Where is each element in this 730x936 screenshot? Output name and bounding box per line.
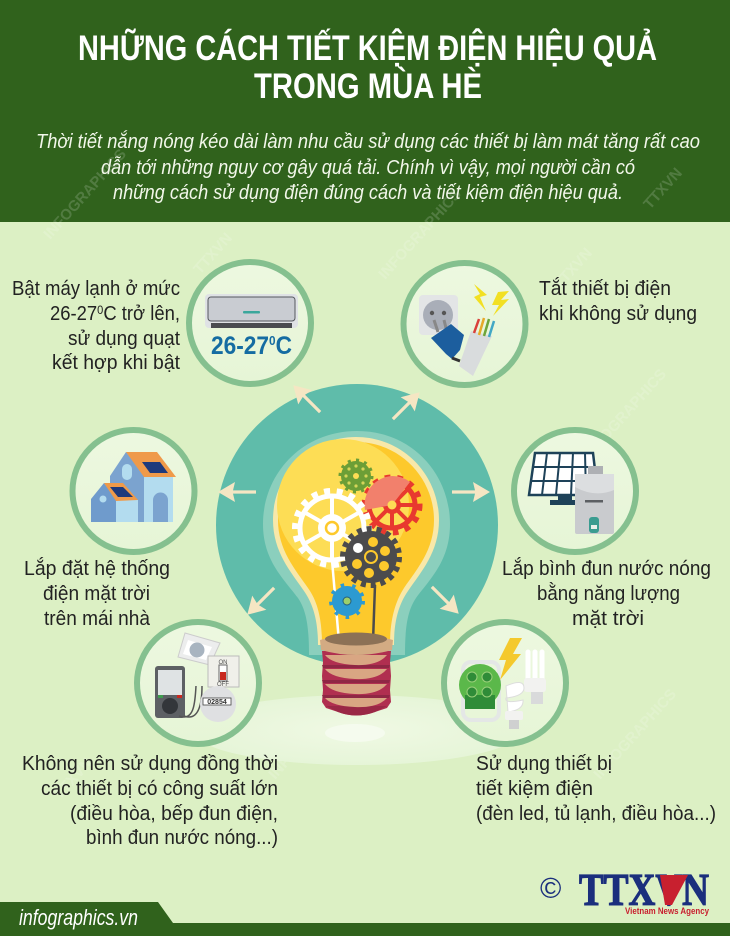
text: TTXVN bbox=[50, 755, 96, 803]
glass highlight bbox=[277, 439, 409, 571]
text: TTXVN bbox=[640, 165, 686, 213]
arrow: to solar heater bbox=[452, 482, 490, 502]
label: air conditioner advice: sử dụng quạt bbox=[68, 328, 180, 350]
label: rooftop solar advice: điện mặt trời bbox=[43, 583, 150, 605]
white stem bbox=[332, 560, 339, 642]
icon: multimeter, socket, switch and meter: OFF bbox=[217, 682, 229, 688]
label: air conditioner advice: Bật máy lạnh ở mức bbox=[12, 278, 180, 300]
gear: white bbox=[296, 492, 368, 564]
label: rooftop solar advice bbox=[24, 557, 170, 630]
text: INFOGRAPHICS bbox=[40, 146, 130, 243]
icon: socket and plug with cables bbox=[419, 284, 509, 376]
footer site name: infographics.vn bbox=[19, 905, 138, 930]
label: air conditioner advice bbox=[12, 278, 180, 374]
label: high-power appliances advice: các thiết bị có công suất lớn bbox=[41, 778, 278, 800]
label: efficient devices advice: (đèn led, tủ lạnh, điều hòa...) bbox=[476, 803, 716, 825]
arrow: to plug bbox=[386, 385, 427, 426]
icon: light bulb with gears bbox=[263, 431, 450, 716]
logo: TTXVN bbox=[540, 865, 709, 916]
icon: multimeter, socket, switch and meter: ON bbox=[218, 660, 228, 666]
label: rooftop solar advice: trên mái nhà bbox=[44, 608, 151, 630]
icon: solar panel and heater bbox=[529, 453, 614, 534]
panel: energy-saving devices circle bbox=[444, 622, 566, 744]
tagline: Vietnam News Agency bbox=[625, 906, 709, 916]
arrow: to meter bbox=[240, 581, 281, 622]
text: INFOGRAPHICS bbox=[265, 686, 355, 783]
text: INFOGRAPHICS bbox=[580, 366, 670, 463]
copyright mark: © bbox=[540, 873, 561, 905]
text: INFOGRAPHICS bbox=[590, 686, 680, 783]
icon: green socket reel, bolt and CFL bulbs bbox=[459, 638, 546, 729]
bulb glass bbox=[273, 437, 439, 645]
teal disc behind bulb bbox=[216, 384, 498, 666]
arrow: to air conditioner bbox=[286, 378, 327, 419]
dark stem bbox=[373, 585, 375, 642]
panel: plug circle bbox=[404, 263, 526, 385]
bulb screw base bbox=[320, 632, 393, 716]
label: unplug advice bbox=[539, 277, 697, 325]
label: efficient devices advice bbox=[476, 753, 716, 825]
icon: multimeter, socket, switch and meter: 02854 bbox=[207, 699, 227, 706]
label: efficient devices advice: Sử dụng thiết bị bbox=[476, 753, 612, 775]
text: 26-27°C: C bbox=[276, 332, 292, 360]
gear: red bbox=[365, 476, 419, 532]
text: 26-27°C: 0 bbox=[269, 333, 276, 348]
text: INFOGRAPHICS bbox=[375, 186, 465, 283]
label: solar water heater advice: Lắp bình đun nước nóng bbox=[502, 557, 711, 580]
title bbox=[78, 28, 657, 106]
label: air conditioner advice: 0 bbox=[97, 303, 104, 317]
icon: house with solar panels bbox=[91, 452, 176, 522]
label: high-power appliances advice: (điều hòa, bếp đun điện, bbox=[70, 803, 278, 825]
label: solar water heater advice: bằng năng lượng bbox=[537, 582, 680, 605]
intro text: những cách sử dụng điện đúng cách và tiết kiệm điện hiệu quả. bbox=[113, 181, 623, 204]
intro text: dẫn tới những nguy cơ gây quá tải. Chính vì vậy, mọi người cần có bbox=[101, 156, 635, 179]
panel: solar water heater circle bbox=[514, 430, 636, 552]
gear: dark bbox=[343, 529, 399, 585]
label: solar water heater advice: mặt trời bbox=[572, 608, 644, 630]
label: unplug advice: Tắt thiết bị điện bbox=[539, 277, 671, 300]
title: TRONG MÙA HÈ bbox=[254, 66, 482, 106]
gear: green bbox=[340, 460, 372, 492]
text: TTXVN bbox=[550, 245, 596, 293]
panel: house circle bbox=[72, 430, 194, 552]
icon: multimeter, socket, switch and meter bbox=[155, 633, 239, 722]
panel: meter circle bbox=[137, 622, 259, 744]
label: high-power appliances advice bbox=[22, 753, 278, 849]
intro text bbox=[36, 130, 700, 204]
label: air conditioner advice: 26-27 bbox=[50, 303, 101, 325]
label: air conditioner advice: kết hợp khi bật bbox=[52, 352, 180, 374]
arrow: to house bbox=[218, 482, 256, 502]
label: rooftop solar advice: Lắp đặt hệ thống bbox=[24, 557, 170, 580]
label: air conditioner advice: C trở lên, bbox=[103, 303, 180, 325]
label: high-power appliances advice: bình đun nước nóng...) bbox=[86, 827, 278, 849]
text: 26-27°C: 26-27 bbox=[211, 332, 275, 360]
red V bbox=[660, 875, 688, 905]
arrows bbox=[218, 378, 490, 622]
label: efficient devices advice: tiết kiệm điện bbox=[476, 778, 593, 800]
panel: air conditioner circle bbox=[189, 262, 311, 384]
gear: blue bbox=[331, 585, 363, 617]
bulb halo bbox=[263, 431, 450, 655]
text: TTXVN bbox=[190, 230, 236, 278]
label: unplug advice: khi không sử dụng bbox=[539, 303, 697, 325]
label: solar water heater advice bbox=[502, 557, 711, 630]
icon: air conditioner bbox=[205, 294, 298, 328]
filament stems bbox=[332, 560, 375, 642]
arrow: to bulbs bbox=[425, 580, 466, 621]
floor glow under bulb bbox=[192, 695, 522, 765]
label: high-power appliances advice: Không nên sử dụng đồng thời bbox=[22, 753, 278, 775]
panel: header band bbox=[0, 0, 730, 222]
footer bar bbox=[0, 902, 730, 936]
